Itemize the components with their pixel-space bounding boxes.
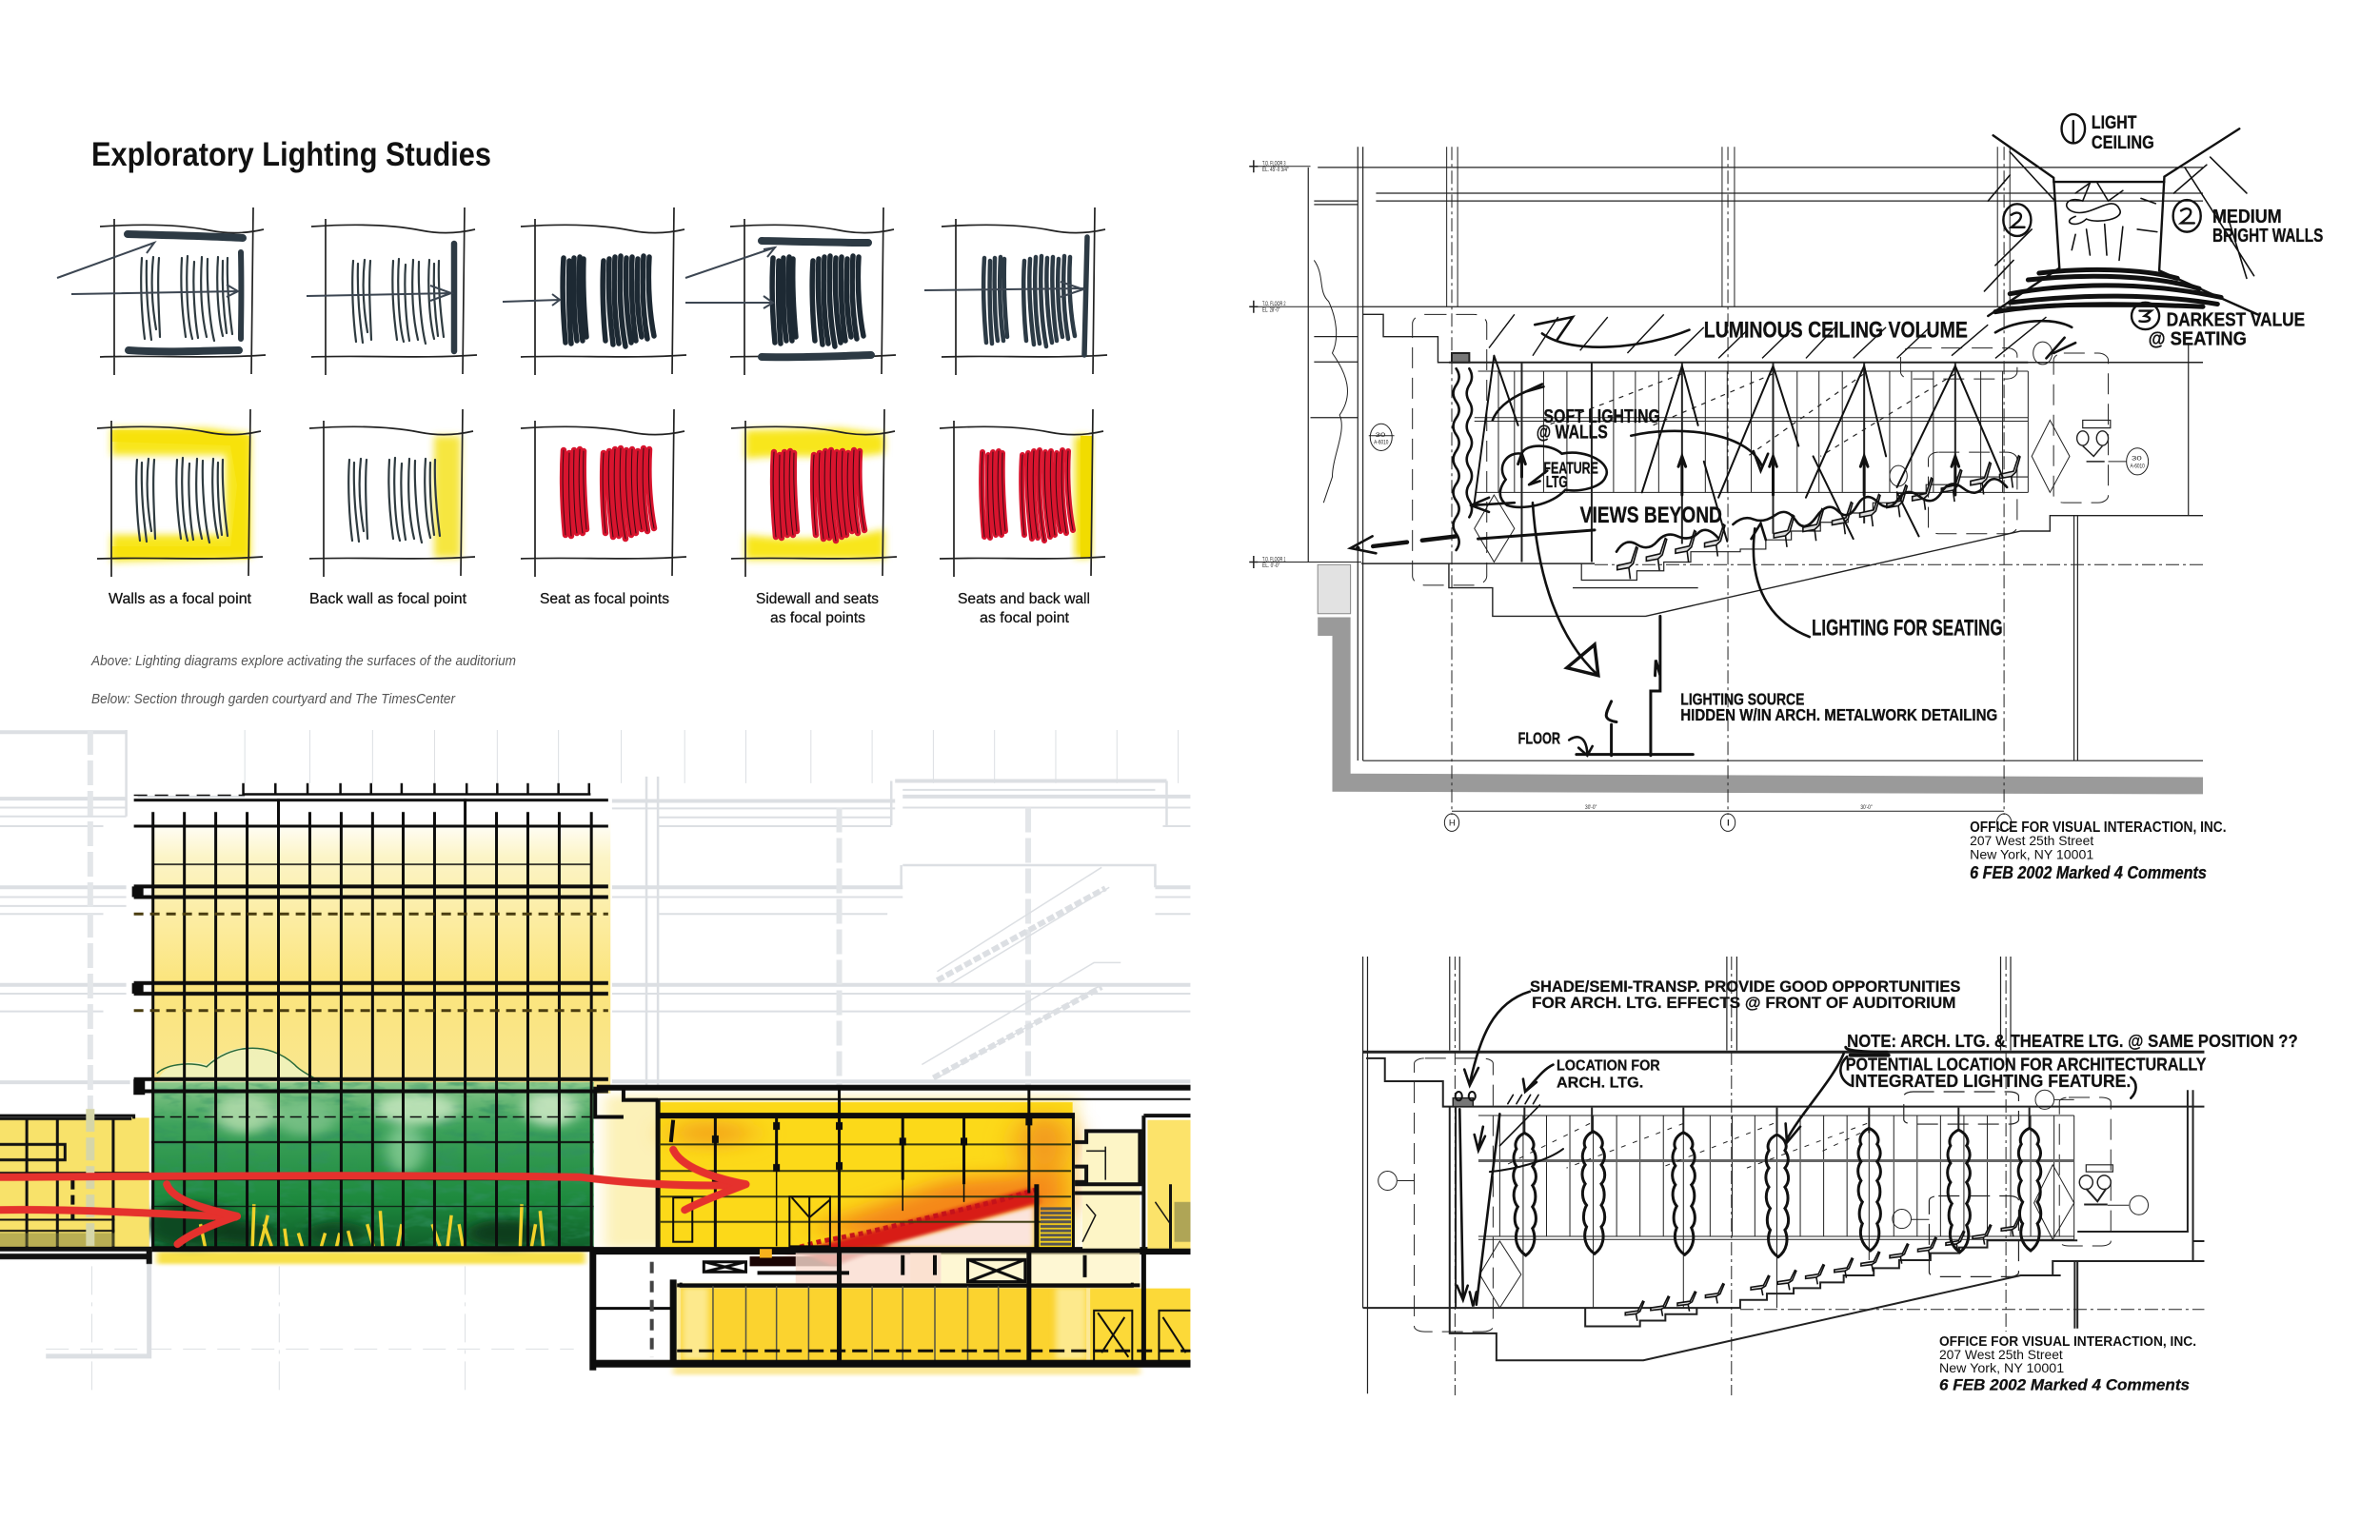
handwritten notes: CEILING — [2092, 132, 2154, 153]
handwritten notes: FLOOR — [1518, 730, 1560, 747]
study 2 sketch: back wall as focal point — [307, 207, 477, 375]
drawing tiny labels: EL. 28'-0" — [1262, 306, 1280, 313]
office stamp — [1939, 1333, 2196, 1393]
photo notes: Above: Lighting diagrams explore activating the surfaces of the auditorium — [90, 654, 516, 669]
handwritten notes: MEDIUM — [2212, 206, 2282, 227]
drawing tiny labels: EL. 45'-0 3/4" — [1262, 166, 1289, 173]
handwritten notes: LTG — [1546, 473, 1568, 491]
handwritten notes — [1518, 112, 2323, 747]
study 2 colour: yellow back wall — [309, 409, 475, 577]
handwritten notes: ARCH. LTG. — [1557, 1075, 1643, 1091]
marker: wall wave, light cones, seating wave — [1351, 317, 2075, 756]
handwritten notes: VIEWS BEYOND — [1580, 503, 1722, 527]
garden green planting — [146, 1082, 594, 1249]
tower yellow glow — [151, 819, 610, 1264]
office stamp: New York, NY 10001 — [1939, 1361, 2064, 1375]
left building — [0, 1109, 151, 1264]
office stamp — [1970, 819, 2227, 882]
title: Exploratory Lighting Studies — [91, 136, 491, 173]
study 4 colour: yellow sidewalls and red seats — [731, 409, 897, 577]
auditorium stair with seats — [800, 1188, 1034, 1246]
captions: Seats and back wall — [958, 591, 1090, 607]
mechanical rooms right — [1075, 1116, 1198, 1249]
handwritten notes: @ SEATING — [2149, 327, 2247, 349]
study 1 sketch: walls as focal point — [57, 207, 266, 375]
drawing tiny labels: 30 — [1376, 431, 1385, 438]
study 3 colour: red seats — [521, 409, 686, 577]
seats — [1617, 456, 2020, 579]
drawing tiny labels: EL. 0'-0" — [1262, 562, 1280, 569]
drawing tiny labels: T.O. FLOOR 3 — [1262, 160, 1286, 167]
drawing tiny labels: 30'-0" — [1585, 803, 1597, 811]
drawing tiny labels: 30 — [2132, 455, 2142, 462]
drawing tiny labels: H — [1449, 819, 1456, 828]
ghost building lines — [0, 730, 1194, 1397]
drawing tiny labels: A-6010 — [2130, 463, 2145, 469]
study 5 sketch: seats and back wall — [924, 207, 1107, 375]
captions: as focal point — [980, 610, 1070, 626]
captions: as focal points — [770, 610, 865, 626]
study 3 sketch: seats as focal points — [503, 207, 686, 375]
photo notes: Below: Section through garden courtyard and The TimesCenter — [91, 692, 456, 707]
handwritten notes: LIGHTING FOR SEATING — [1812, 616, 2003, 641]
office stamp: New York, NY 10001 — [1970, 847, 2093, 862]
drawing tiny labels: T.O. FLOOR 2 — [1262, 300, 1286, 307]
handwritten notes: LIGHTING SOURCE — [1680, 691, 1804, 709]
marker: vertical lighting clouds — [1514, 1128, 2041, 1257]
captions: Back wall as focal point — [309, 591, 467, 607]
handwritten notes: LUMINOUS CEILING VOLUME — [1704, 318, 1968, 343]
office stamp: 207 West 25th Street — [1970, 833, 2093, 848]
tower frame — [134, 783, 608, 1249]
office stamp: 6 FEB 2002 Marked 4 Comments — [1970, 862, 2207, 882]
drawing: section with architectural lighting notes — [1363, 957, 2298, 1395]
auditorium framing — [593, 1087, 1194, 1251]
base section — [1363, 957, 2204, 1395]
seats — [1625, 1217, 2020, 1321]
drawing tiny labels: 30'-0" — [1860, 803, 1873, 811]
handwritten notes: SOFT LIGHTING — [1543, 405, 1660, 427]
handwritten notes: LOCATION FOR — [1557, 1057, 1660, 1074]
captions: Walls as a focal point — [109, 591, 252, 607]
handwritten notes — [1530, 977, 2298, 1091]
auditorium lit volume — [605, 1096, 1079, 1266]
tree canopy — [157, 1047, 322, 1084]
handwritten notes: LIGHT — [2092, 112, 2137, 133]
drawing tiny labels — [1262, 160, 2145, 828]
study 5 colour: red seats and yellow back wall — [940, 409, 1105, 577]
base architectural section — [1249, 147, 2203, 831]
drawing: section marked with lighting comments — [1249, 112, 2323, 882]
captions — [109, 591, 1090, 626]
study 4 sketch: sidewall and seats — [685, 207, 896, 375]
drawing tiny labels: I — [1727, 819, 1730, 828]
drawing tiny labels: A-6010 — [1374, 439, 1388, 445]
office stamp: 207 West 25th Street — [1939, 1348, 2063, 1362]
basement theatre — [593, 1249, 1194, 1374]
photo notes — [90, 654, 516, 707]
captions: Sidewall and seats — [756, 591, 879, 607]
drawing tiny labels: T.O. FLOOR 1 — [1262, 556, 1286, 563]
red arrows — [0, 1150, 746, 1244]
section through garden courtyard and TimesCenter — [0, 730, 1198, 1397]
office stamp: OFFICE FOR VISUAL INTERACTION, INC. — [1970, 819, 2227, 836]
study 1 colour: yellow walls — [97, 409, 263, 577]
handwritten notes: @ WALLS — [1537, 421, 1608, 443]
captions: Seat as focal points — [540, 591, 669, 607]
handwritten notes: FOR ARCH. LTG. EFFECTS @ FRONT OF AUDITORIUM — [1532, 994, 1955, 1012]
handwritten notes: FEATURE — [1543, 460, 1598, 477]
panel: lighting diagrams — [57, 207, 1107, 577]
marker sketch: ceiling and walls values — [1984, 114, 2257, 329]
handwritten notes: HIDDEN W/IN ARCH. METALWORK DETAILING — [1680, 706, 1997, 724]
marker: ceiling hatch — [1489, 314, 2046, 358]
marker: arrows and hatching — [1456, 992, 2136, 1306]
